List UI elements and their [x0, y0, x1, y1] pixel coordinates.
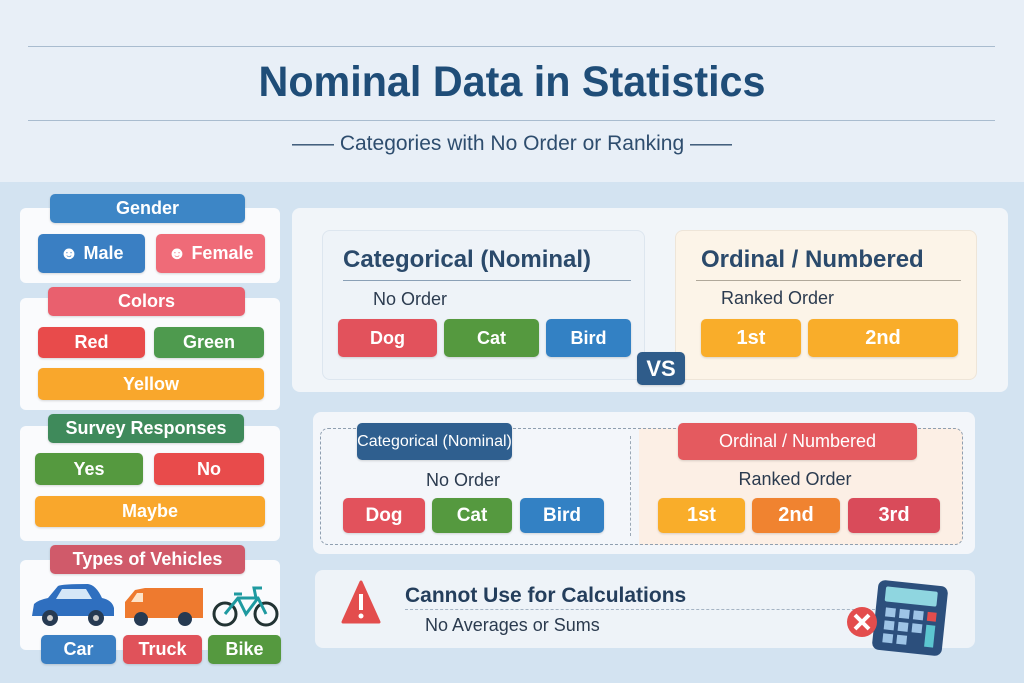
panel: vehicles: Truck [138, 639, 187, 659]
ordinal heading: Ordinal / Numbered [719, 431, 876, 451]
panel: colors: Green [183, 332, 235, 352]
panel: middle comparison: Dog [366, 504, 402, 526]
panel: gender: Gender [116, 198, 179, 218]
ordinal card: Ordinal / Numbered [701, 246, 924, 273]
subtitle: —— Categories with No Order or Ranking —— [292, 132, 732, 155]
panel: vehicles: Car [63, 639, 94, 659]
panel: gender: ☻ Male [60, 243, 123, 263]
panel: middle comparison: Ranked Order [738, 469, 852, 489]
panel: top comparison [292, 208, 1008, 392]
panel: colors: Red [74, 332, 108, 352]
ordinal card [675, 230, 977, 380]
panel: warning [315, 570, 975, 648]
panel: survey responses: Survey Responses [65, 418, 227, 438]
title: Nominal Data in Statistics [259, 58, 765, 106]
categorical card: Categorical (Nominal) [343, 246, 591, 273]
panel: middle comparison: 2nd [778, 504, 814, 526]
icon: car [32, 584, 114, 626]
icon: warning [342, 580, 380, 624]
panel: vehicles: Types of Vehicles [73, 549, 222, 569]
panel: gender [20, 194, 280, 283]
panel: gender: ☻ Female [168, 243, 253, 263]
categorical card: Bird [570, 328, 606, 348]
panel: vehicles [20, 545, 282, 666]
categorical card: Dog [370, 328, 405, 348]
panel: colors [20, 287, 280, 410]
ordinal card: Ranked Order [721, 288, 834, 308]
panel: middle comparison [313, 412, 975, 554]
panel: middle comparison: 3rd [878, 504, 910, 526]
categorical card [322, 230, 645, 380]
panel: colors: Colors [118, 291, 175, 311]
icon: bike [212, 586, 278, 626]
panel: warning: No Averages or Sums [425, 615, 600, 635]
ordinal card: 2nd [865, 326, 901, 348]
vs badge: VS [646, 356, 676, 380]
panel: vehicles: Bike [225, 639, 264, 659]
panel: middle comparison: Cat [457, 504, 487, 526]
icon: truck [125, 588, 203, 626]
panel: survey responses: No [197, 458, 221, 478]
header background [0, 0, 1024, 182]
panel: middle comparison: Bird [543, 504, 581, 526]
panel: colors: Yellow [123, 374, 179, 394]
panel: survey responses [20, 414, 280, 541]
categorical heading: Categorical (Nominal) [357, 432, 512, 450]
panel: middle comparison: No Order [426, 470, 500, 490]
vs badge [637, 352, 685, 385]
panel: survey responses: Maybe [122, 501, 178, 521]
panel: survey responses: Yes [73, 458, 105, 478]
categorical card: Cat [477, 328, 506, 348]
categorical heading [357, 423, 512, 460]
icon: calculator [847, 580, 948, 656]
panel: warning: Cannot Use for Calculations [405, 584, 686, 607]
panel: middle comparison: 1st [687, 504, 716, 526]
ordinal card: 1st [737, 326, 765, 348]
categorical card: No Order [373, 289, 447, 309]
ordinal heading [678, 423, 917, 460]
